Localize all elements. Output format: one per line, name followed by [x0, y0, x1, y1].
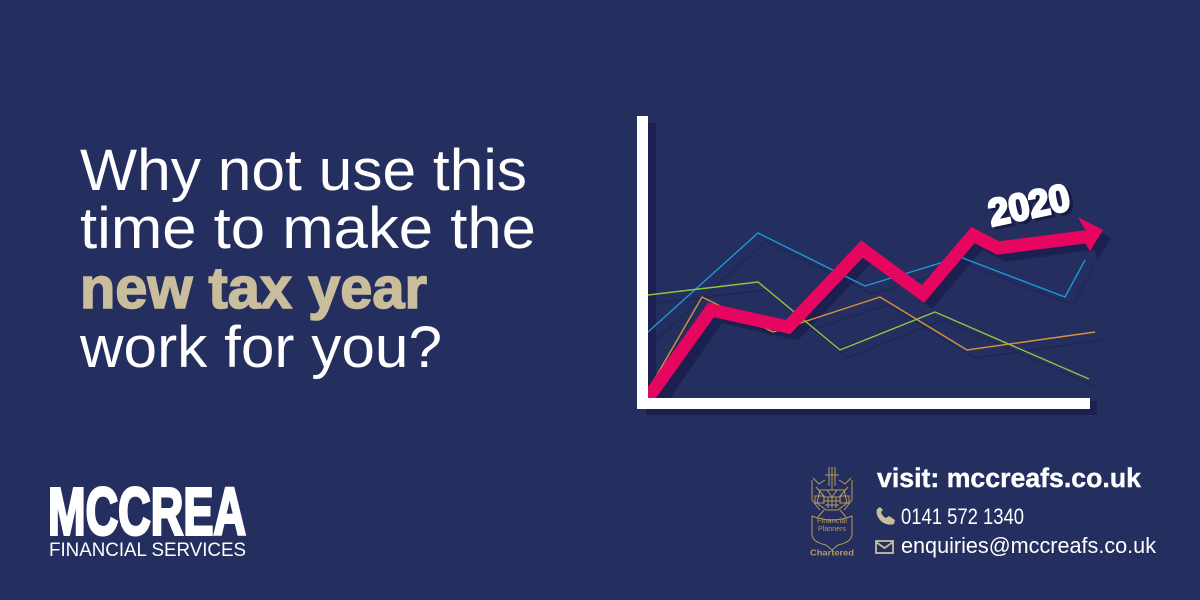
orange line: [650, 297, 1095, 387]
phone number: 0141 572 1340: [901, 504, 1024, 529]
company logo: MCCREA: [48, 474, 246, 550]
axes: [637, 116, 1090, 409]
website: visit: mccreafs.co.uk: [877, 463, 1142, 493]
company logo: [48, 474, 246, 561]
blue line: [648, 233, 1085, 332]
headline: Why not use this: [80, 138, 527, 203]
headline: work for you?: [79, 315, 442, 380]
thin line shadows: [656, 241, 1103, 395]
icon: phone: [877, 507, 895, 525]
company logo: FINANCIAL SERVICES: [49, 540, 246, 561]
icon: envelope: [876, 541, 893, 553]
email address: enquiries@mccreafs.co.uk: [901, 533, 1157, 558]
chartered crest: Financial: [817, 516, 847, 525]
chartered crest: Planners: [818, 524, 846, 533]
year label: 2020: [985, 177, 1074, 235]
year label: 2020: [988, 179, 1077, 237]
green line: [648, 282, 1089, 379]
chartered crest: Chartered: [810, 548, 854, 558]
chartered crest: [810, 467, 854, 558]
headline: new tax year: [80, 256, 427, 321]
axis shadows: [646, 123, 1097, 415]
pink trend line shadow: [658, 225, 1111, 404]
headline: [79, 138, 536, 380]
pink trend line with arrow: [648, 217, 1103, 398]
line chart: [637, 116, 1111, 415]
headline: time to make the: [80, 196, 536, 261]
